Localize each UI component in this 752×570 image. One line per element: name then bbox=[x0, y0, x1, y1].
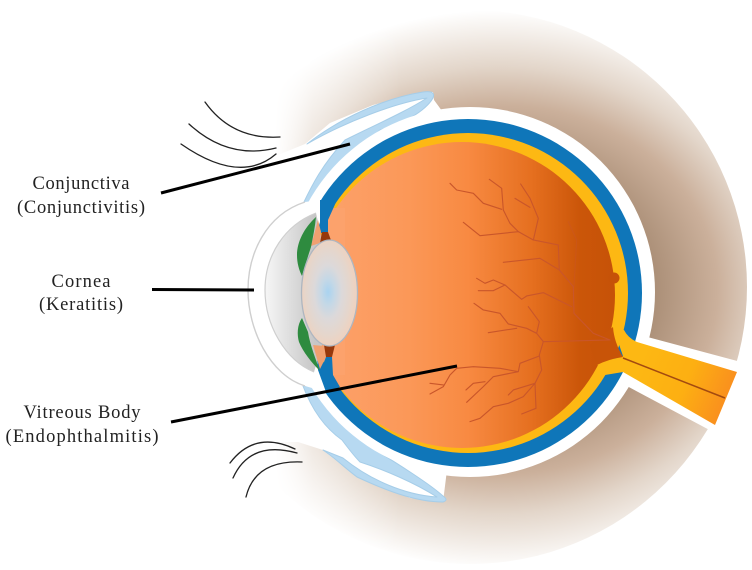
label: cornea bbox=[39, 272, 123, 315]
label: cornea: Cornea bbox=[52, 272, 110, 292]
label: conjunctiva: Conjunctiva bbox=[32, 174, 130, 194]
lower ciliary wedge bbox=[313, 345, 340, 391]
leader line: vitreous body bbox=[171, 366, 457, 422]
upper iris bbox=[297, 217, 316, 276]
leader line: conjunctiva bbox=[161, 144, 350, 193]
eyeball outer white sclera bbox=[285, 107, 655, 477]
leader line: cornea bbox=[152, 288, 254, 292]
lower conjunctiva bbox=[303, 386, 446, 502]
brown orbit halo bbox=[287, 18, 747, 562]
optic disc bump bbox=[608, 272, 620, 284]
yellow retina ring bbox=[308, 133, 628, 453]
cornea bbox=[248, 200, 326, 392]
label: vitreous body: Vitreous Body bbox=[24, 403, 141, 423]
lower eyelashes bbox=[230, 442, 302, 497]
lower iris bbox=[298, 318, 320, 371]
label: conjunctiva bbox=[17, 174, 145, 218]
blue choroid ring bbox=[294, 119, 642, 467]
retinal blood vessels bbox=[430, 179, 610, 422]
label: cornea: (Keratitis) bbox=[39, 295, 123, 315]
label: vitreous body bbox=[6, 403, 158, 447]
upper ciliary wedge bbox=[311, 200, 337, 246]
upper eyelashes bbox=[181, 102, 280, 167]
optic nerve bbox=[590, 327, 737, 425]
label: vitreous body: (Endophthalmitis) bbox=[6, 427, 158, 447]
lens bbox=[302, 240, 358, 346]
optic nerve white sheath bbox=[625, 335, 741, 434]
label: conjunctiva: (Conjunctivitis) bbox=[17, 198, 145, 218]
upper conjunctiva bbox=[303, 92, 434, 205]
vitreous body bbox=[309, 142, 620, 448]
